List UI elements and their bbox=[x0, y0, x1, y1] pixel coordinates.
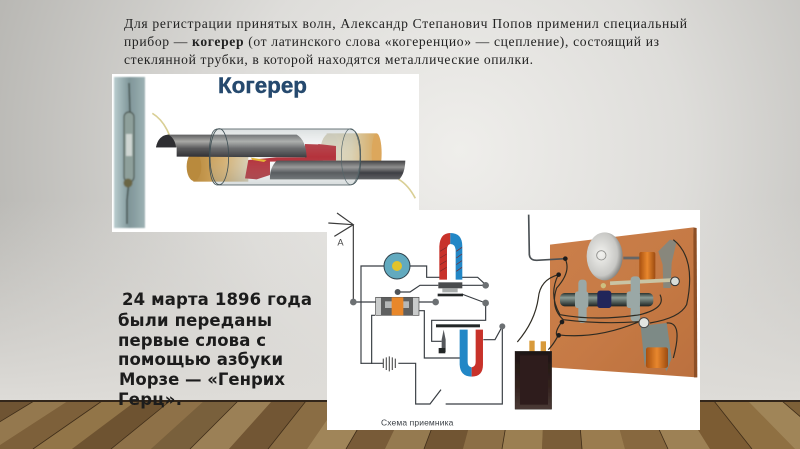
wooden floor bbox=[0, 400, 800, 449]
wiring bbox=[517, 240, 690, 358]
left cork bbox=[193, 153, 248, 182]
receiver device on wooden board bbox=[515, 215, 697, 409]
bottom electromagnet bbox=[460, 330, 472, 377]
coherer illustration bbox=[152, 113, 415, 198]
date text block: Герц». bbox=[118, 390, 182, 409]
caption: Схема приемника bbox=[381, 417, 454, 427]
bell disc bbox=[384, 253, 410, 279]
circuit wires bbox=[353, 266, 502, 404]
date text block: помощью азбуки bbox=[118, 350, 283, 369]
antenna wire bbox=[529, 215, 565, 260]
lower metal strip bbox=[270, 161, 405, 179]
wires bbox=[152, 113, 169, 135]
heading: Когерер: Когерер bbox=[218, 73, 307, 98]
bottom coil bbox=[646, 347, 668, 368]
antenna symbol bbox=[328, 213, 353, 302]
date text block: Морзе — «Генрих bbox=[119, 370, 285, 389]
bottom armature bbox=[436, 324, 480, 327]
upper metal strip bbox=[156, 135, 307, 157]
top electromagnet bbox=[439, 233, 450, 280]
image: coherer diagram bbox=[112, 73, 419, 232]
date text block bbox=[118, 290, 312, 409]
image: receiver schematic and device bbox=[327, 210, 700, 430]
binding posts bbox=[563, 256, 568, 261]
date text block: были переданы bbox=[118, 311, 272, 330]
wire terminals bbox=[350, 299, 357, 305]
wooden board bbox=[550, 227, 697, 377]
coherer symbol bbox=[376, 297, 419, 315]
photo of coherer tube bbox=[114, 77, 145, 228]
bell bbox=[623, 254, 642, 262]
right cork bbox=[327, 133, 377, 173]
intro paragraph: Для регистрации принятых волн, Александр Степанович Попов применил специальный bbox=[124, 16, 687, 31]
top coil bbox=[639, 252, 655, 279]
battery bbox=[529, 341, 535, 352]
coherer assembly bbox=[560, 276, 653, 323]
glass tube bbox=[209, 129, 361, 185]
date text block: первые слова с bbox=[118, 331, 266, 350]
receiver circuit diagram bbox=[328, 213, 505, 427]
intro paragraph bbox=[124, 16, 687, 67]
bottom bracket bbox=[641, 323, 672, 371]
antenna label A: А bbox=[337, 237, 344, 247]
top bracket bbox=[658, 240, 677, 288]
intro paragraph: прибор — когерер (от латинского слова «когеренцио» — сцепление), состоящий из bbox=[124, 34, 659, 50]
intro paragraph: стеклянной трубки, в которой находятся металлические опилки. bbox=[124, 52, 533, 67]
battery symbol bbox=[383, 356, 395, 371]
date text block: 24 марта 1896 года bbox=[122, 290, 312, 309]
filings bbox=[245, 144, 336, 179]
